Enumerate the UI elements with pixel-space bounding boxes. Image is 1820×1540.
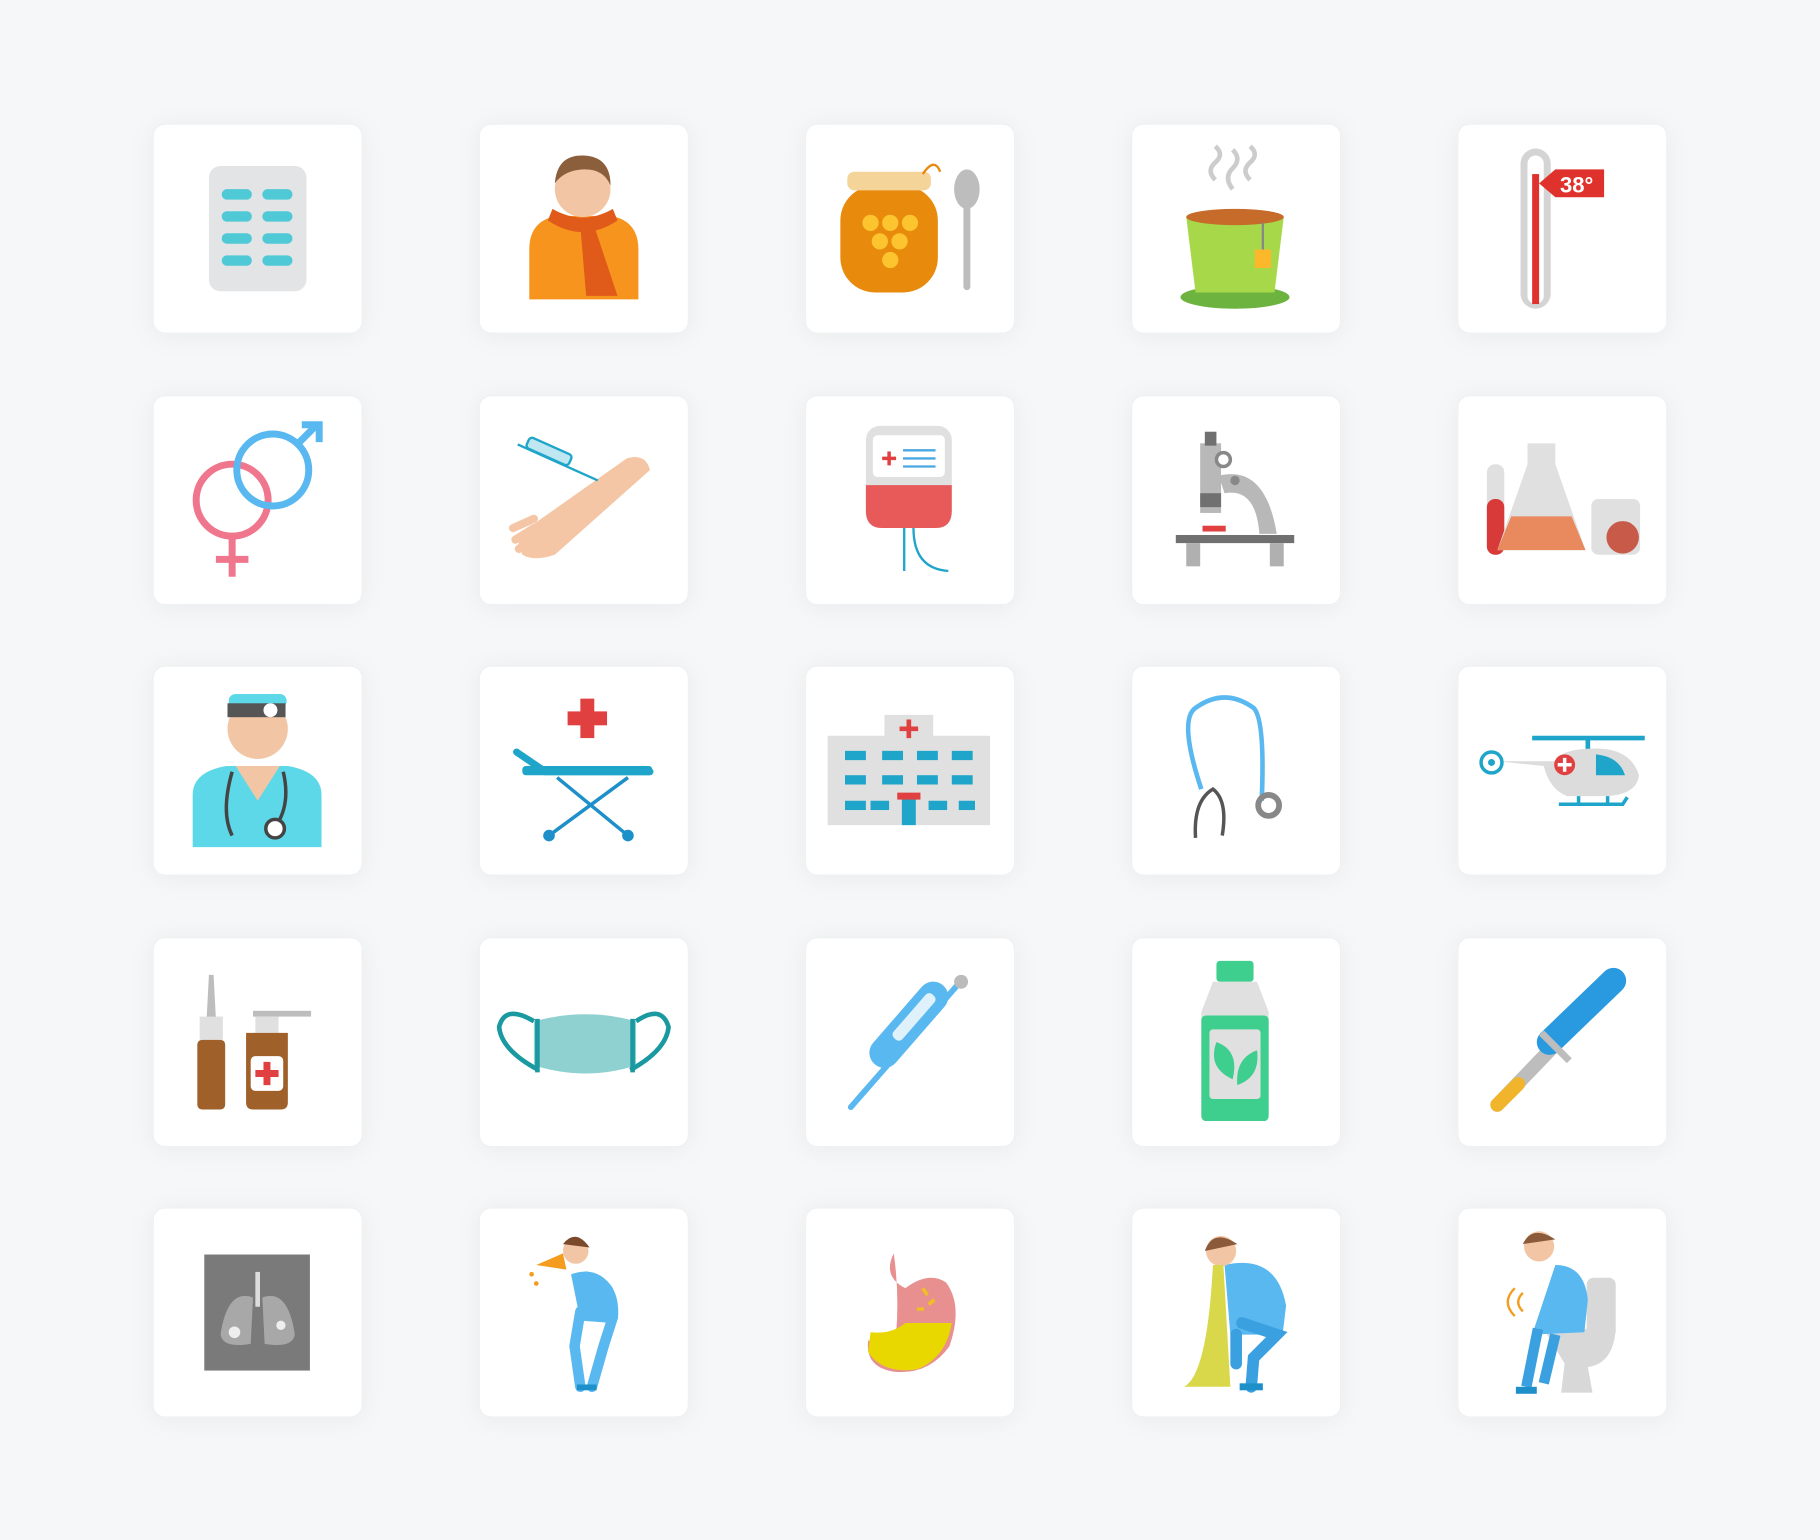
icon: thermometer 38: 38° [1560,173,1593,198]
icon: helicopter [1481,738,1645,804]
icon: lung x-ray [204,1255,310,1371]
icon: doctor [193,694,322,847]
icon: herbal syrup bottle [1201,961,1269,1121]
icon: gender symbols [196,425,319,577]
icon: stretcher [517,691,652,841]
icon: IV bag [866,426,952,571]
icon: pills blister [209,166,306,291]
icon: lab flasks [1487,443,1640,555]
icon: face mask [499,1014,669,1073]
icon: vomiting person [1184,1236,1286,1390]
icon: person on toilet [1508,1231,1616,1394]
icon: stomach [868,1253,956,1372]
icon: dropper [1497,981,1613,1105]
icon: honey jar [840,165,980,292]
icon: person with scarf [529,155,638,299]
icon: syringe arm [513,437,650,558]
icon: hospital building [828,715,990,825]
icon: stethoscope [1188,697,1279,838]
icon: microscope [1176,432,1294,566]
icon: nasal sprays [197,975,311,1109]
icon: tea cup [1180,146,1290,309]
icon: sneezing person [529,1237,613,1390]
icon: digital thermometer [851,975,968,1107]
icon: thermometer 38 [1521,149,1604,309]
